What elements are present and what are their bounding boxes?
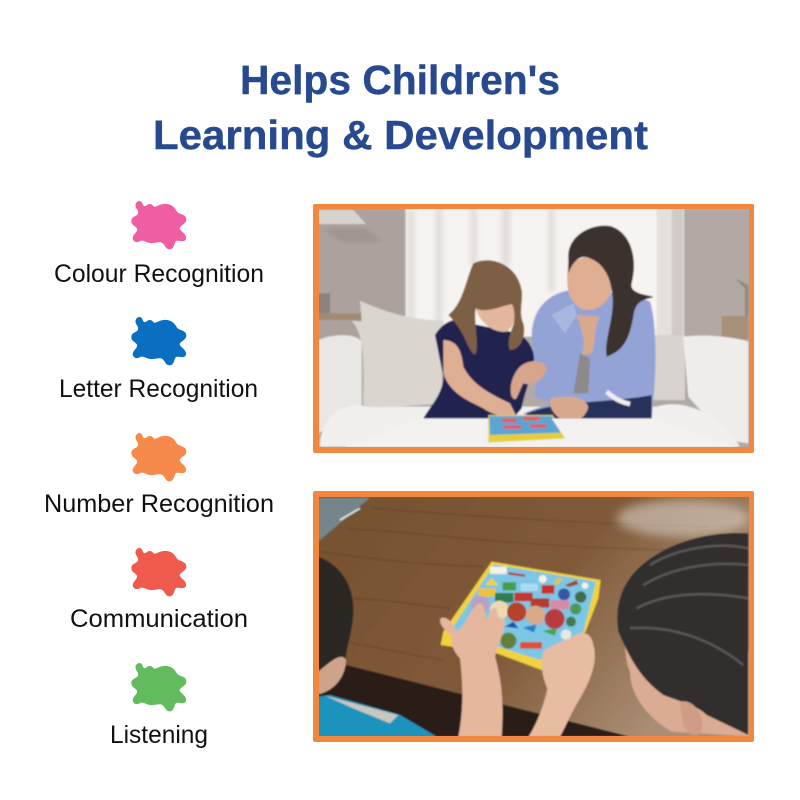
title [153,57,648,158]
child right [624,646,749,736]
item: colour recognition: Colour Recognition [54,260,264,288]
girl [423,320,534,418]
toy tablet [488,415,566,443]
item: number recognition: Number Recognition [44,490,274,518]
title: Learning & Development [153,112,648,158]
title: Helps Children's [240,57,560,103]
toy tablet [441,562,601,670]
photo panel: children using toy tablet on table [313,491,754,742]
child left [319,556,354,672]
woman [523,290,656,418]
item: listening [110,663,208,749]
item: listening: Listening [110,721,208,749]
item: communication: Communication [70,605,248,633]
cushion [352,301,443,407]
item: letter recognition [59,317,258,403]
item: letter recognition: Letter Recognition [59,375,258,403]
item: number recognition [44,433,274,518]
item: communication [70,548,248,633]
skills list [44,201,274,749]
table edge and floor [318,665,630,737]
photo panel: mother and daughter on sofa [313,204,754,453]
item: colour recognition [54,201,264,288]
table [345,419,737,447]
hands [440,603,505,737]
